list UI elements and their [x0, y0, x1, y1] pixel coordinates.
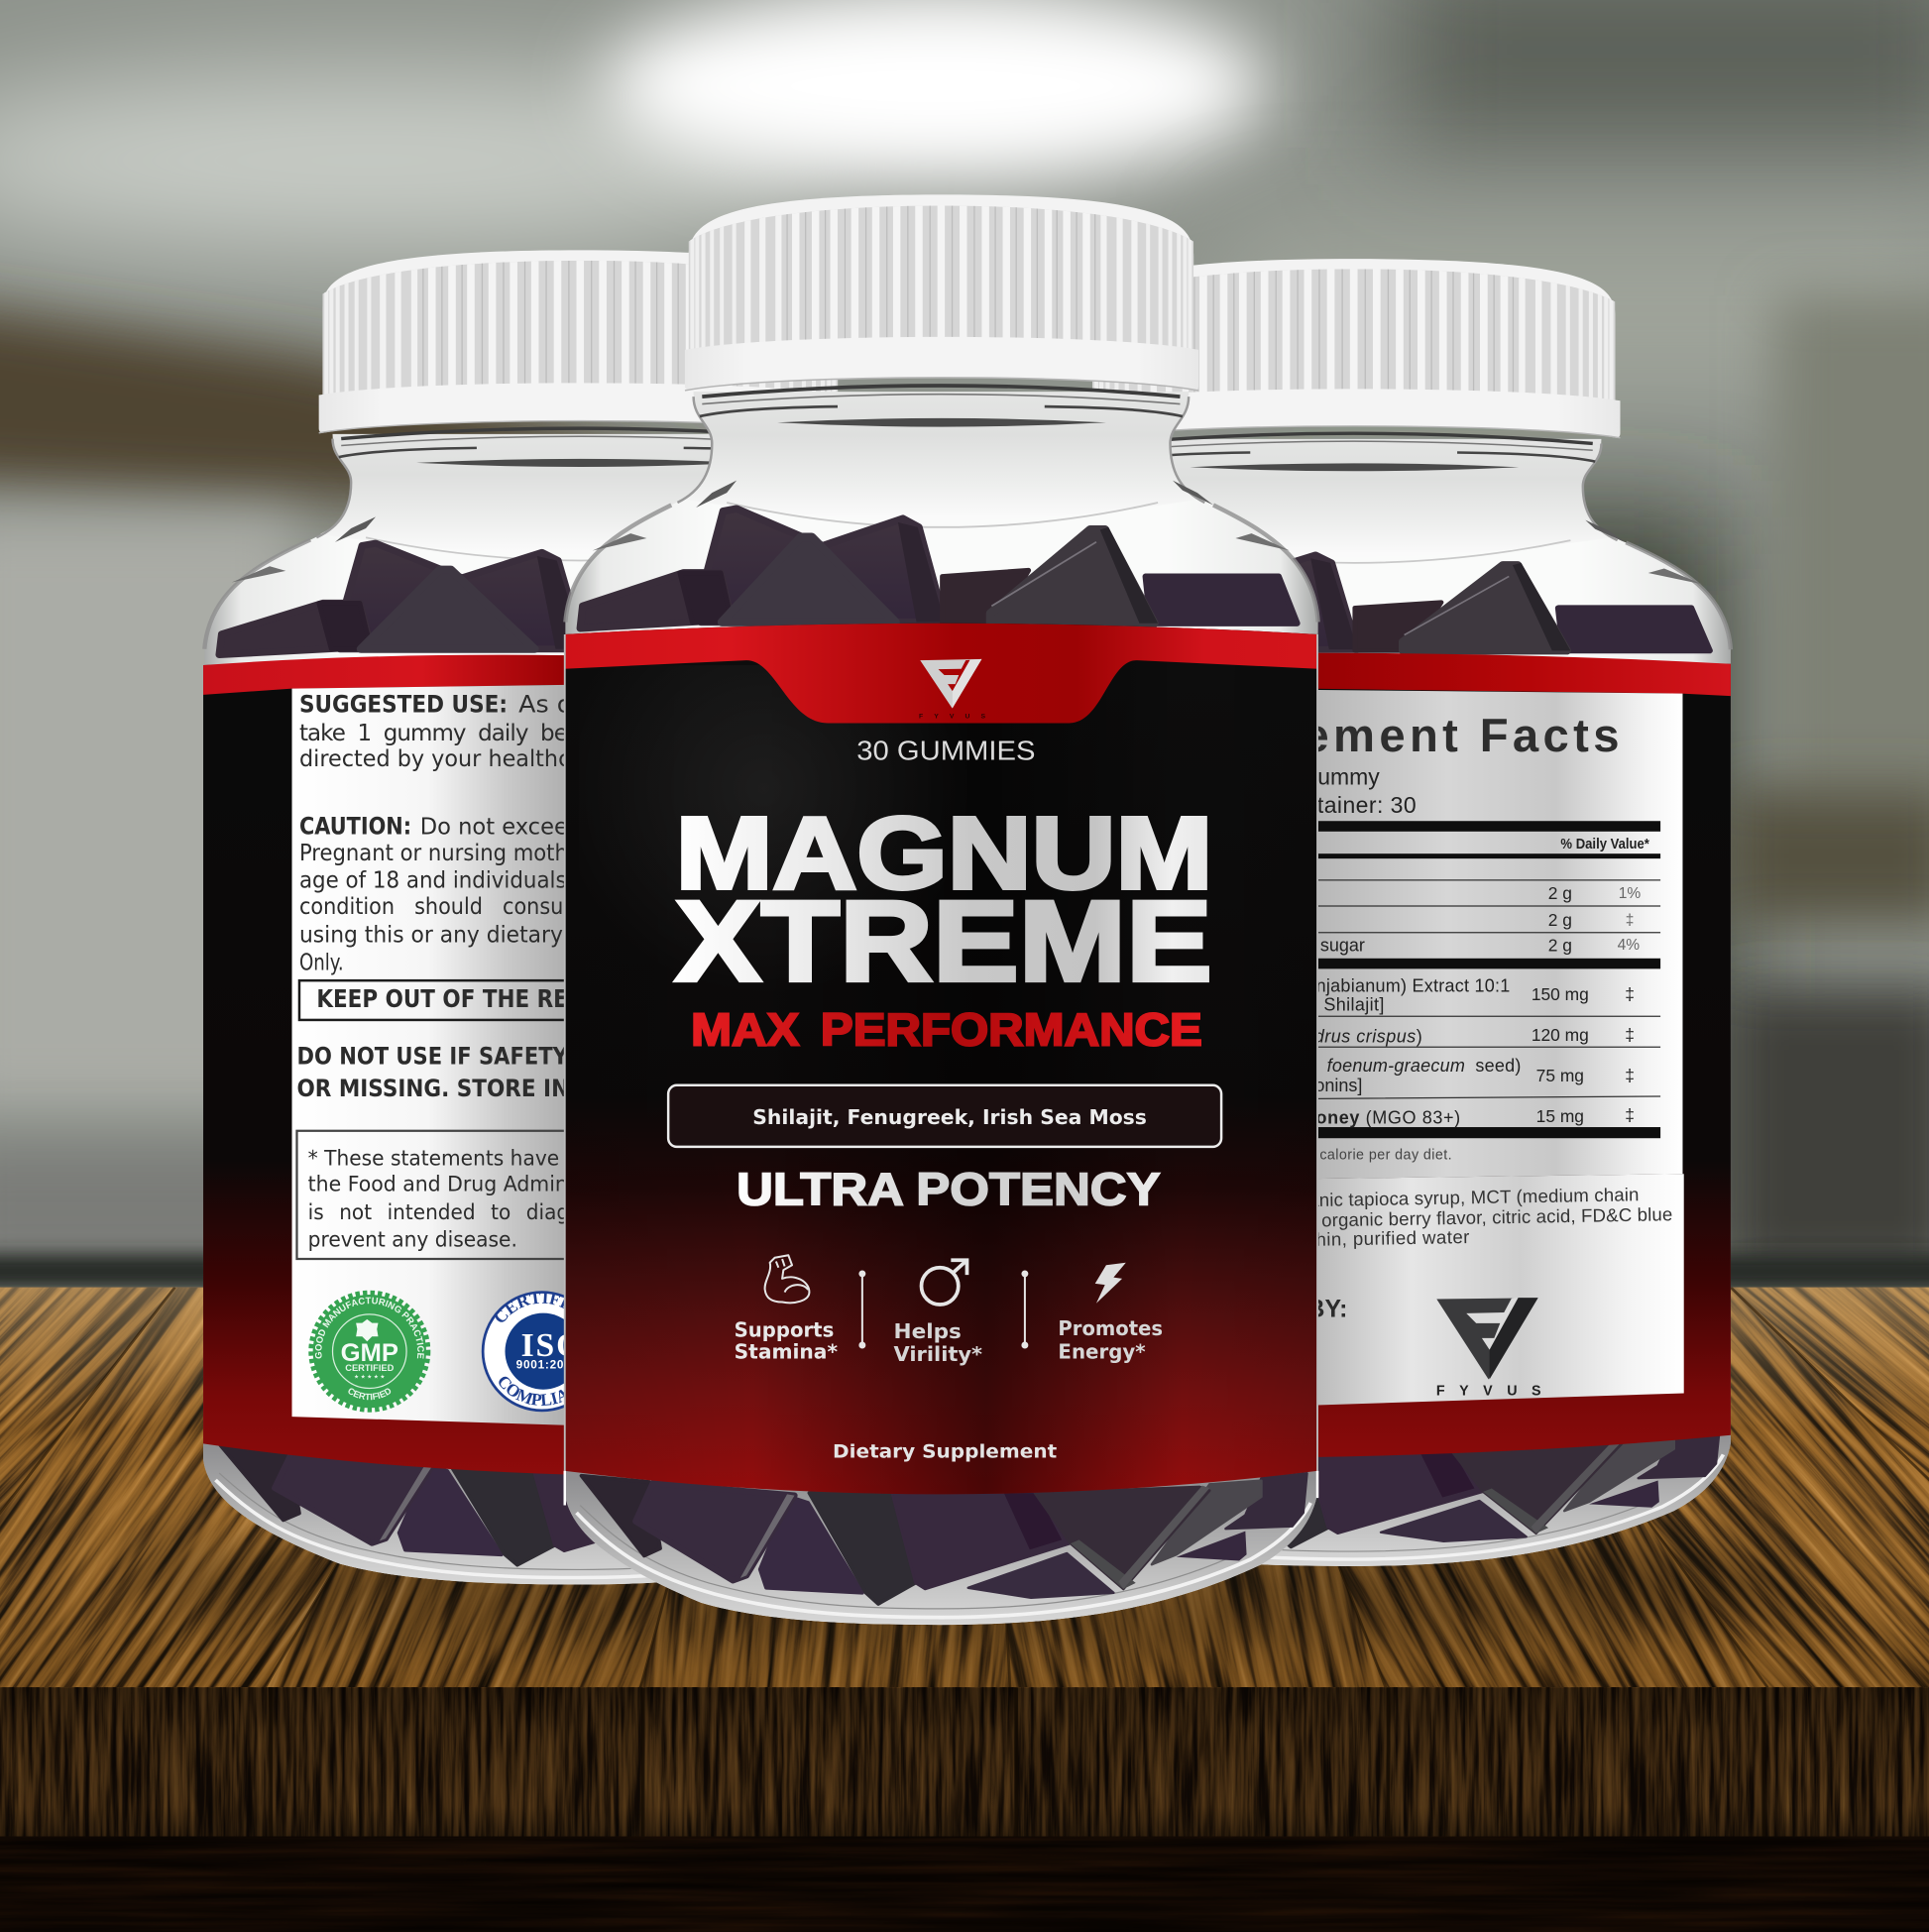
suggested use text: SUGGESTED USE:	[299, 690, 508, 718]
front bottle cap	[684, 194, 1201, 391]
benefit: promotes energy: Promotes	[1058, 1316, 1163, 1340]
facts table: 2 g	[1548, 910, 1572, 930]
facts table: Shilajit (Asphaltum punjabianum) Extract 10:1	[1138, 975, 1510, 995]
facts table: 150 mg	[1532, 984, 1589, 1004]
serving information	[1132, 764, 1417, 818]
icon: FYVUS logo dark: FYVUS	[1436, 1383, 1541, 1399]
caution text: age of 18 and individuals	[299, 867, 567, 893]
GMP certified badge: CERTIFIED	[348, 1388, 391, 1400]
left white panel	[292, 685, 567, 1425]
facts table: % Daily Value*	[1560, 837, 1649, 852]
facts table: 2 g	[1548, 883, 1572, 903]
ingredients callout box: Shilajit, Fenugreek, Irish Sea Moss	[752, 1105, 1147, 1129]
facts table: 75 mg	[1536, 1066, 1584, 1085]
suggested use text: As d	[518, 690, 573, 718]
wooden table front edge	[0, 1687, 1929, 1838]
facts table: Added sugar	[1264, 935, 1365, 955]
safety warning: DO NOT USE IF SAFETY	[296, 1043, 569, 1071]
caution text	[299, 812, 569, 976]
ingredients and logo panel	[1305, 1174, 1684, 1406]
wooden table top	[0, 1288, 1929, 1694]
front label body	[564, 624, 1318, 1494]
GMP certified badge: ★ ★ ★ ★ ★	[354, 1374, 385, 1381]
facts table: ‡	[1625, 1025, 1635, 1045]
facts table: ‡	[1625, 1066, 1635, 1085]
facts table: Fenugreek (Trigonella foenum-graecum seed)	[1133, 1056, 1522, 1076]
caution text: Do not excee	[420, 814, 568, 840]
distributed by: DISTRIBUTED BY:	[1135, 1296, 1347, 1322]
facts table: 15 mg	[1536, 1106, 1584, 1126]
FDA disclaimer box: is not intended to diag	[308, 1200, 569, 1225]
icon: male symbol	[922, 1260, 966, 1305]
right bottle: supplement facts label	[976, 259, 1731, 1566]
benefit: promotes energy: Energy*	[1058, 1340, 1146, 1364]
ISO 9001 compliance badge: CERTIFIED	[496, 1293, 564, 1322]
title: Magnum Xtreme	[675, 796, 1212, 1005]
FDA disclaimer box: the Food and Drug Admin	[308, 1173, 568, 1197]
serving information: Servings Per Container: 30	[1132, 792, 1417, 818]
count: 30 gummies: 30 GUMMIES	[856, 736, 1035, 766]
GMP certified badge: GOOD MANUFACTURING PRACTICE	[315, 1297, 424, 1359]
GMP certified badge	[308, 1291, 430, 1413]
caution text: condition should consul	[299, 894, 569, 920]
front bottle glass and gummies	[564, 386, 1318, 1625]
ISO 9001 compliance badge: 9001:2015	[516, 1358, 579, 1372]
GMP certified badge: GMP	[341, 1340, 398, 1367]
GMP certified badge: CERTIFIED	[345, 1363, 395, 1373]
caution text: Only.	[299, 951, 344, 976]
facts table: ‡	[1626, 912, 1634, 929]
facts table	[1133, 821, 1660, 1163]
other ingredients	[1122, 1184, 1673, 1253]
facts table: 120 mg	[1532, 1025, 1589, 1045]
left bottle cap	[317, 250, 846, 433]
other ingredients: Starch, arch, organic berry flavor, citric acid, FD&C blue	[1209, 1203, 1673, 1232]
suggested use text	[299, 690, 573, 772]
title: Magnum Xtreme: XTREME	[675, 877, 1212, 1005]
FDA disclaimer box: prevent any disease.	[308, 1228, 517, 1253]
facts table: Based on a 2,000 calorie per day diet.	[1197, 1147, 1452, 1163]
divider	[858, 1270, 865, 1348]
other ingredients: sunflower lecithin, purified water	[1192, 1226, 1470, 1252]
caution text: using this or any dietary	[299, 923, 563, 949]
benefit: promotes energy	[1058, 1263, 1163, 1364]
benefit: helps virility	[894, 1260, 982, 1366]
caution text: CAUTION:	[299, 812, 411, 840]
divider	[1021, 1270, 1028, 1348]
left label red band	[203, 655, 567, 695]
icon: lightning bolt	[1095, 1263, 1126, 1304]
icon: FYVUS logo light	[919, 659, 986, 720]
ISO 9001 compliance badge: ISO	[521, 1327, 584, 1364]
benefit: supports stamina: Supports	[735, 1317, 834, 1341]
suggested use text: directed by your healthc	[299, 746, 570, 772]
icon: flexed arm	[765, 1255, 809, 1303]
right label red band	[1305, 653, 1731, 696]
benefit: helps virility: Virility*	[894, 1342, 982, 1366]
other ingredients: Other Ingredients: Organic tapioca syrup, MCT (medium chain	[1122, 1184, 1640, 1213]
FDA disclaimer box	[296, 1131, 587, 1259]
dietary supplement footer: Dietary Supplement	[833, 1442, 1057, 1463]
facts table: 1%	[1619, 885, 1641, 902]
facts table: ‡	[1625, 1105, 1635, 1125]
title: Magnum Xtreme: MAGNUM	[676, 796, 1212, 910]
safety warning	[296, 1043, 569, 1102]
facts table: 4%	[1618, 937, 1640, 954]
FDA disclaimer box: * These statements have	[308, 1147, 559, 1172]
left label body	[203, 655, 567, 1474]
facts table: Irish Sea Moss (Chondrus crispus)	[1133, 1026, 1422, 1046]
serving information: Serving Size: 1 Gummy	[1141, 764, 1380, 790]
front bottle	[564, 194, 1318, 1625]
supplement facts heading: Supplement Facts	[1152, 710, 1624, 762]
left bottle: directions label	[202, 250, 839, 1584]
right bottle cap	[1087, 259, 1623, 438]
blurred room background	[0, 0, 1929, 1294]
right bottle glass and gummies	[976, 433, 1731, 1566]
keep out box	[299, 980, 583, 1020]
ISO 9001 compliance badge	[482, 1291, 584, 1412]
keep out box: KEEP OUT OF THE RE	[316, 984, 568, 1013]
benefit: supports stamina	[735, 1255, 838, 1364]
benefit: helps virility: Helps	[894, 1319, 962, 1343]
icon: FYVUS logo light: FYVUS	[919, 713, 986, 720]
facts table: [Equiv. to 1,500 mg Shilajit]	[1159, 995, 1385, 1015]
facts table: ‡	[1625, 984, 1635, 1004]
facts table: Manuka Honey (MGO 83+)	[1227, 1107, 1461, 1127]
left bottle glass and gummies	[203, 428, 958, 1585]
suggested use text: take 1 gummy daily be	[299, 721, 568, 746]
facts table: [50% Saponins]	[1237, 1076, 1362, 1095]
safety warning: OR MISSING. STORE IN	[296, 1075, 569, 1102]
ultra potency heading: ULTRA POTENCY	[737, 1163, 1161, 1214]
benefit: supports stamina: Stamina*	[735, 1340, 838, 1364]
dark base of table	[0, 1837, 1929, 1932]
front label red band with notch	[564, 624, 1318, 723]
ingredients callout box	[668, 1085, 1221, 1147]
caution text: Pregnant or nursing moth	[299, 841, 568, 866]
ISO 9001 compliance badge: COMPLIANT	[499, 1376, 564, 1406]
icon: FYVUS logo dark	[1436, 1298, 1541, 1399]
supplement facts panel	[1305, 690, 1682, 1179]
subtitle: Max Performance: MAX PERFORMANCE	[691, 1003, 1202, 1055]
right label body	[1305, 653, 1731, 1457]
facts table: 2 g	[1548, 935, 1572, 955]
